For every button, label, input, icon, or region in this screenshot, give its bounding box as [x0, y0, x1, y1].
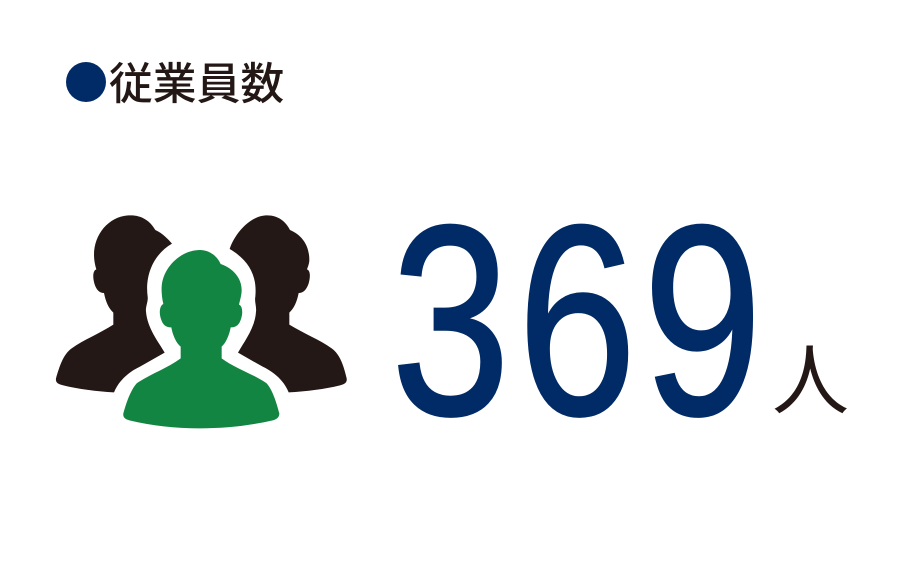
- icon: three people: [56, 215, 347, 428]
- heading text: 従業員数: [109, 60, 284, 109]
- center person: [123, 250, 279, 428]
- number: 369: 369: [391, 169, 762, 472]
- left person: [56, 215, 172, 392]
- heading: employee count: [66, 60, 284, 109]
- unit: people: 人: [772, 339, 849, 425]
- heading bullet: [66, 62, 106, 102]
- right person: [230, 215, 347, 392]
